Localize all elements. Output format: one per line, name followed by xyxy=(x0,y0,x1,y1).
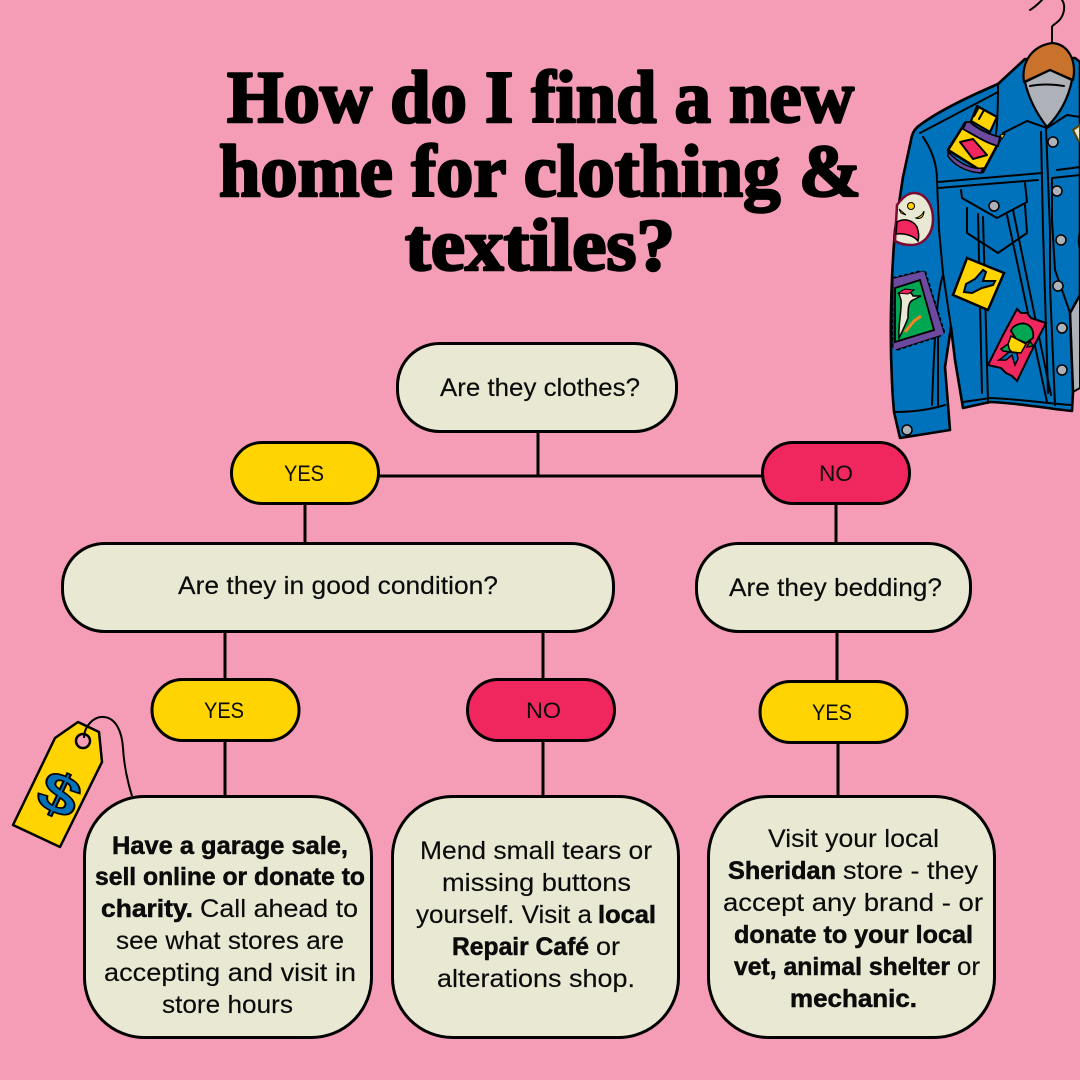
answer: garage sale: charity. xyxy=(101,895,193,923)
yes pill: bedding: YES xyxy=(812,700,852,725)
icon: price tag: $ xyxy=(28,757,91,831)
answer: garage sale: store hours xyxy=(162,991,293,1019)
buttons xyxy=(1048,137,1058,147)
patch: jar xyxy=(948,106,1005,173)
answer: mend and repair: missing buttons xyxy=(442,869,631,897)
yes pill: good condition: YES xyxy=(204,698,244,723)
no pill: clothes: NO xyxy=(819,461,853,486)
no pill: good condition xyxy=(468,680,614,740)
answer: garage sale: sell online or donate to xyxy=(95,863,365,891)
patch: crocodile xyxy=(953,258,1004,310)
answer: sheridan store or donate: accept any brand - or xyxy=(723,889,983,917)
answer: mend and repair: or xyxy=(596,933,620,961)
yes pill: good condition xyxy=(152,680,299,740)
yes pill: bedding xyxy=(760,682,907,742)
title: home for clothing & xyxy=(219,131,861,213)
answer: garage sale: Have a garage sale, xyxy=(112,832,348,860)
hanger hook xyxy=(1030,0,1064,43)
question: good condition xyxy=(62,544,614,632)
patch: frog stamp xyxy=(988,309,1046,381)
question: are they clothes xyxy=(398,344,676,432)
orange hanger xyxy=(1024,43,1074,82)
question: are they clothes: Are they clothes? xyxy=(440,374,640,402)
illustration: denim jacket on hanger xyxy=(891,0,1080,438)
answer: sheridan store or donate: mechanic. xyxy=(790,985,917,1013)
answer: sheridan store or donate xyxy=(708,796,994,1038)
patch: woodpecker stamp xyxy=(895,273,942,348)
answer: mend and repair: Repair Café xyxy=(452,933,589,961)
patch: partial right edge xyxy=(1073,125,1080,141)
answer: mend and repair: Mend small tears or xyxy=(420,837,652,865)
answer: mend and repair: local xyxy=(598,901,656,929)
jacket body xyxy=(891,58,1080,438)
question: good condition: Are they in good condition? xyxy=(178,572,498,600)
answer: sheridan store or donate: Sheridan xyxy=(728,857,836,885)
answer: mend and repair xyxy=(392,796,678,1038)
patch: face circle xyxy=(895,193,933,245)
yes pill: clothes xyxy=(232,442,378,504)
answer: garage sale xyxy=(84,796,372,1038)
title: How do I find a new xyxy=(227,57,855,139)
answer: sheridan store or donate: store - they xyxy=(843,857,979,885)
title xyxy=(219,57,861,287)
no pill: clothes xyxy=(762,442,910,504)
answer: sheridan store or donate: vet, animal shelter xyxy=(734,953,950,981)
icon: price tag xyxy=(13,717,132,847)
answer: garage sale: Call ahead to xyxy=(200,895,358,923)
answer: sheridan store or donate: donate to your local xyxy=(734,921,973,949)
answer: mend and repair: yourself. Visit a xyxy=(416,901,592,929)
flowchart connector lines xyxy=(225,432,838,796)
no pill: good condition: NO xyxy=(526,698,561,723)
answer: sheridan store or donate: Visit your local xyxy=(768,825,939,853)
question: bedding xyxy=(696,544,970,632)
answer: sheridan store or donate: or xyxy=(957,953,980,981)
seams xyxy=(996,84,1080,134)
yes pill: clothes: YES xyxy=(284,461,324,486)
answer: mend and repair: alterations shop. xyxy=(437,965,635,993)
collar lining xyxy=(1025,70,1072,127)
inner lining xyxy=(1070,295,1080,392)
title: textiles? xyxy=(405,205,675,287)
answer: garage sale: accepting and visit in xyxy=(104,959,356,987)
question: bedding: Are they bedding? xyxy=(729,574,942,602)
answer: garage sale: see what stores are xyxy=(116,927,344,955)
